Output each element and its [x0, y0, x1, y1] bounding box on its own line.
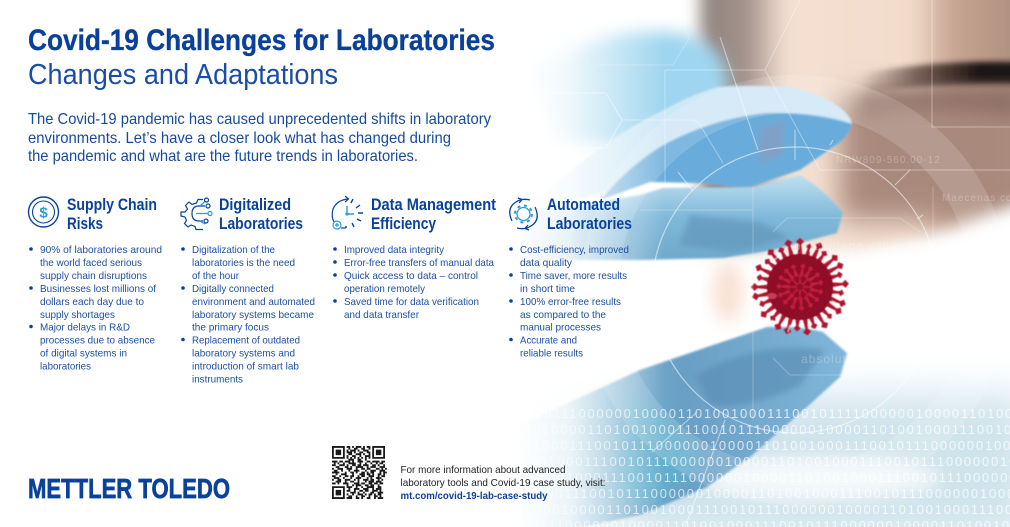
title: Changes and Adaptations — [28, 59, 338, 91]
title — [28, 24, 495, 91]
logo: Mettler Toledo: METTLER TOLEDO — [28, 473, 230, 504]
faint HUD labels: NRW809-560.00-12 — [836, 155, 941, 166]
faint HUD labels: absolute — [801, 352, 854, 366]
heading: automated laboratories: Automated — [547, 196, 620, 214]
bullet list: digitalized laboratories: environment and automated — [192, 296, 315, 308]
finger two — [520, 175, 843, 260]
heading: automated laboratories — [547, 196, 632, 233]
bullet list: automated laboratories: as compared to the — [520, 309, 606, 321]
intro text: The Covid-19 pandemic has caused unprecedented shifts in laboratory — [28, 111, 491, 128]
bullet list: data management efficiency: operation remotely — [344, 283, 426, 295]
bullet list: automated laboratories: 100% error-free results — [520, 296, 621, 308]
QR code — [332, 446, 387, 499]
icon: clock with magnifier — [332, 196, 363, 229]
bullet list: supply chain risks: Major delays in R&D — [40, 322, 130, 334]
intro text: environments. Let’s have a closer look what has changed during — [28, 130, 451, 147]
bullet list: supply chain risks — [29, 244, 162, 372]
bullet list: digitalized laboratories: Replacement of outdated — [192, 334, 300, 346]
bullet list: data management efficiency: Quick access to data – control — [344, 270, 478, 282]
panel: data management efficiency — [332, 196, 496, 321]
bullet list: supply chain risks: Businesses lost millions of — [40, 283, 156, 295]
heading: digitalized laboratories — [219, 196, 303, 233]
bullet list: supply chain risks: laboratories — [40, 360, 91, 372]
virus particle — [751, 238, 849, 336]
bullet list: digitalized laboratories: laboratory systems became — [192, 309, 314, 321]
heading: supply chain risks — [67, 196, 157, 233]
bullet list: supply chain risks: supply shortages — [40, 309, 115, 321]
bullet list: automated laboratories: Accurate and — [520, 334, 577, 346]
bullet list: supply chain risks: dollars each day due to — [40, 296, 144, 308]
title: Covid-19 Challenges for Laboratories — [28, 24, 495, 57]
icon: dollar coin — [28, 197, 58, 227]
heading: data management efficiency: Efficiency — [371, 215, 437, 233]
white sleeve — [720, 195, 1010, 450]
footer call to action: For more information about advanced — [400, 464, 566, 476]
bullet list: data management efficiency: Error-free transfers of manual data — [344, 257, 494, 269]
icon: gear with circuit nodes — [181, 198, 212, 230]
panel: digitalized laboratories — [181, 196, 315, 386]
intro text: the pandemic and what are the future trends in laboratories. — [28, 148, 418, 165]
bullet list: digitalized laboratories — [181, 244, 315, 386]
bullet list: supply chain risks: of digital systems in — [40, 348, 127, 360]
heading: supply chain risks: Risks — [67, 215, 103, 233]
bullet list: digitalized laboratories: laboratory systems and — [192, 348, 295, 360]
heading: digitalized laboratories: Laboratories — [219, 215, 303, 233]
panel: supply chain risks — [28, 196, 162, 372]
bullet list: automated laboratories: data quality — [520, 257, 573, 269]
panel: automated laboratories — [509, 196, 632, 360]
bullet list: automated laboratories — [509, 244, 629, 360]
face background — [700, 0, 1010, 250]
bullet list: supply chain risks: processes due to absence — [40, 334, 155, 346]
heading: data management efficiency: Data Management — [371, 196, 496, 214]
bullet list: automated laboratories: Time saver, more results — [520, 270, 627, 282]
icon: cycle arrows with gear — [510, 198, 537, 230]
bullet list: data management efficiency — [333, 244, 494, 321]
lower pale blue blur — [520, 394, 1010, 527]
faint HUD labels — [794, 155, 1010, 366]
bullet list: data management efficiency: Saved time for data verification — [344, 296, 479, 308]
left white fade — [515, 0, 665, 527]
binary digits — [486, 406, 1010, 527]
bullet list: supply chain risks: 90% of laboratories around — [40, 244, 162, 256]
intro text — [28, 111, 491, 165]
bullet list: digitalized laboratories: of the hour — [192, 270, 239, 282]
bullet list: supply chain risks: the world faced serious — [40, 257, 142, 269]
bullet list: digitalized laboratories: the primary focus — [192, 322, 269, 334]
finger one — [520, 86, 852, 215]
footer call to action — [400, 464, 606, 502]
heading: automated laboratories: Laboratories — [547, 215, 632, 233]
footer call to action: mt.com/covid-19-lab-case-study — [400, 490, 548, 502]
bullet list: automated laboratories: manual processes — [520, 322, 601, 334]
bullet list: digitalized laboratories: introduction of smart lab — [192, 360, 299, 372]
footer call to action: laboratory tools and Covid-19 case study, visit: — [400, 477, 606, 489]
faint HUD labels: percentage value — [794, 239, 902, 253]
finger three — [520, 327, 847, 527]
heading: data management efficiency — [371, 196, 496, 233]
HUD rings and lines — [520, 0, 1010, 527]
bullet list: automated laboratories: reliable results — [520, 348, 583, 360]
bullet list: data management efficiency: and data transfer — [344, 309, 419, 321]
bullet list: digitalized laboratories: laboratories is the need — [192, 257, 295, 269]
bullet list: data management efficiency: Improved data integrity — [344, 244, 445, 256]
bullet list: digitalized laboratories: Digitalization of the — [192, 244, 275, 256]
top blurred glove — [530, 32, 728, 150]
bullet list: automated laboratories: Cost-efficiency, improved — [520, 244, 629, 256]
icon: dollar coin: $ — [39, 204, 48, 222]
heading: digitalized laboratories: Digitalized — [219, 196, 291, 214]
heading: supply chain risks: Supply Chain — [67, 196, 157, 214]
bullet list: digitalized laboratories: instruments — [192, 374, 243, 386]
bullet list: supply chain risks: supply chain disruptions — [40, 270, 147, 282]
bullet list: automated laboratories: in short time — [520, 283, 575, 295]
bullet list: digitalized laboratories: Digitally connected — [192, 283, 274, 295]
